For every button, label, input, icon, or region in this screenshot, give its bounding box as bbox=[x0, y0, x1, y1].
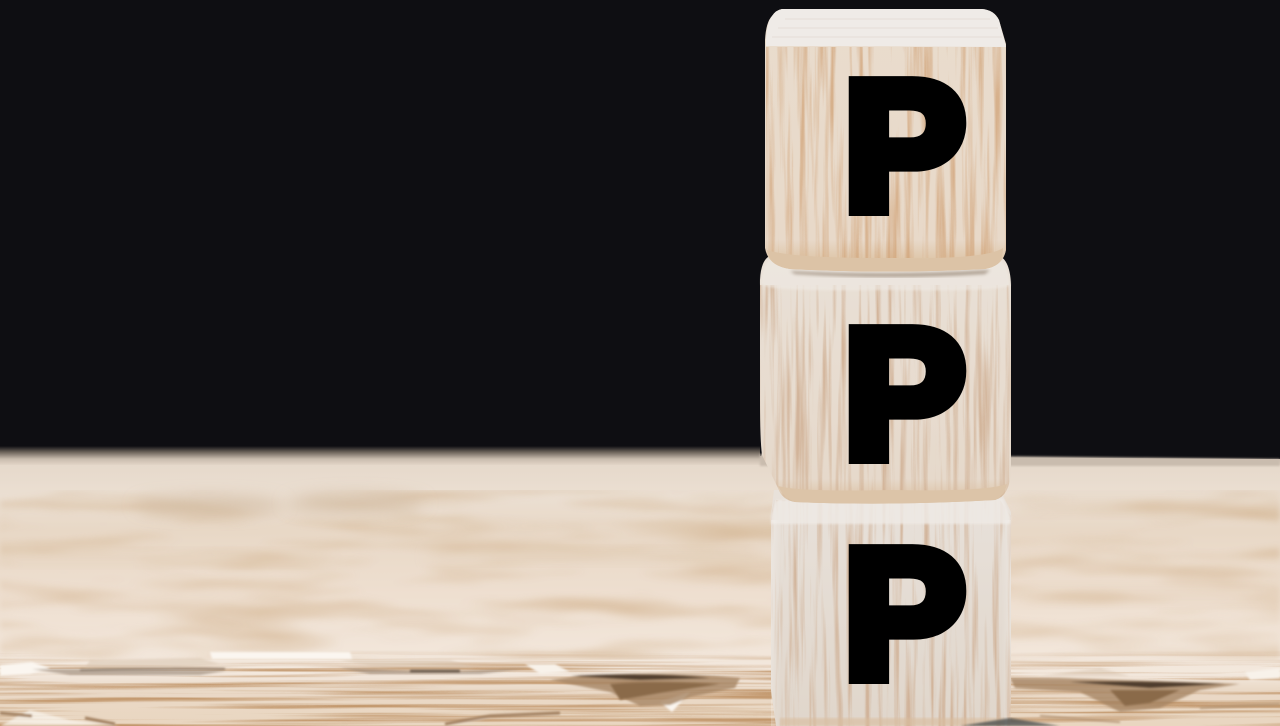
bottom rounded edge of middle block bbox=[778, 484, 1007, 504]
top face of middle block bbox=[761, 258, 1010, 290]
shadow between blocks bbox=[790, 270, 990, 277]
dark background bbox=[0, 0, 1280, 470]
middle wooden block bbox=[760, 255, 1011, 504]
letter P, bottom block: P bbox=[844, 511, 966, 716]
table knots and dark marks bbox=[0, 652, 1280, 726]
top face of top block bbox=[766, 9, 1006, 47]
bottom wooden block bbox=[771, 490, 1060, 726]
letter P, top block: P bbox=[844, 43, 966, 248]
top wooden block bbox=[765, 9, 1006, 272]
wooden table surface bbox=[0, 446, 1280, 726]
top face of bottom block bbox=[771, 498, 1011, 524]
letter P, middle block: P bbox=[844, 291, 966, 496]
bottom rounded edge of top block bbox=[767, 248, 1003, 272]
